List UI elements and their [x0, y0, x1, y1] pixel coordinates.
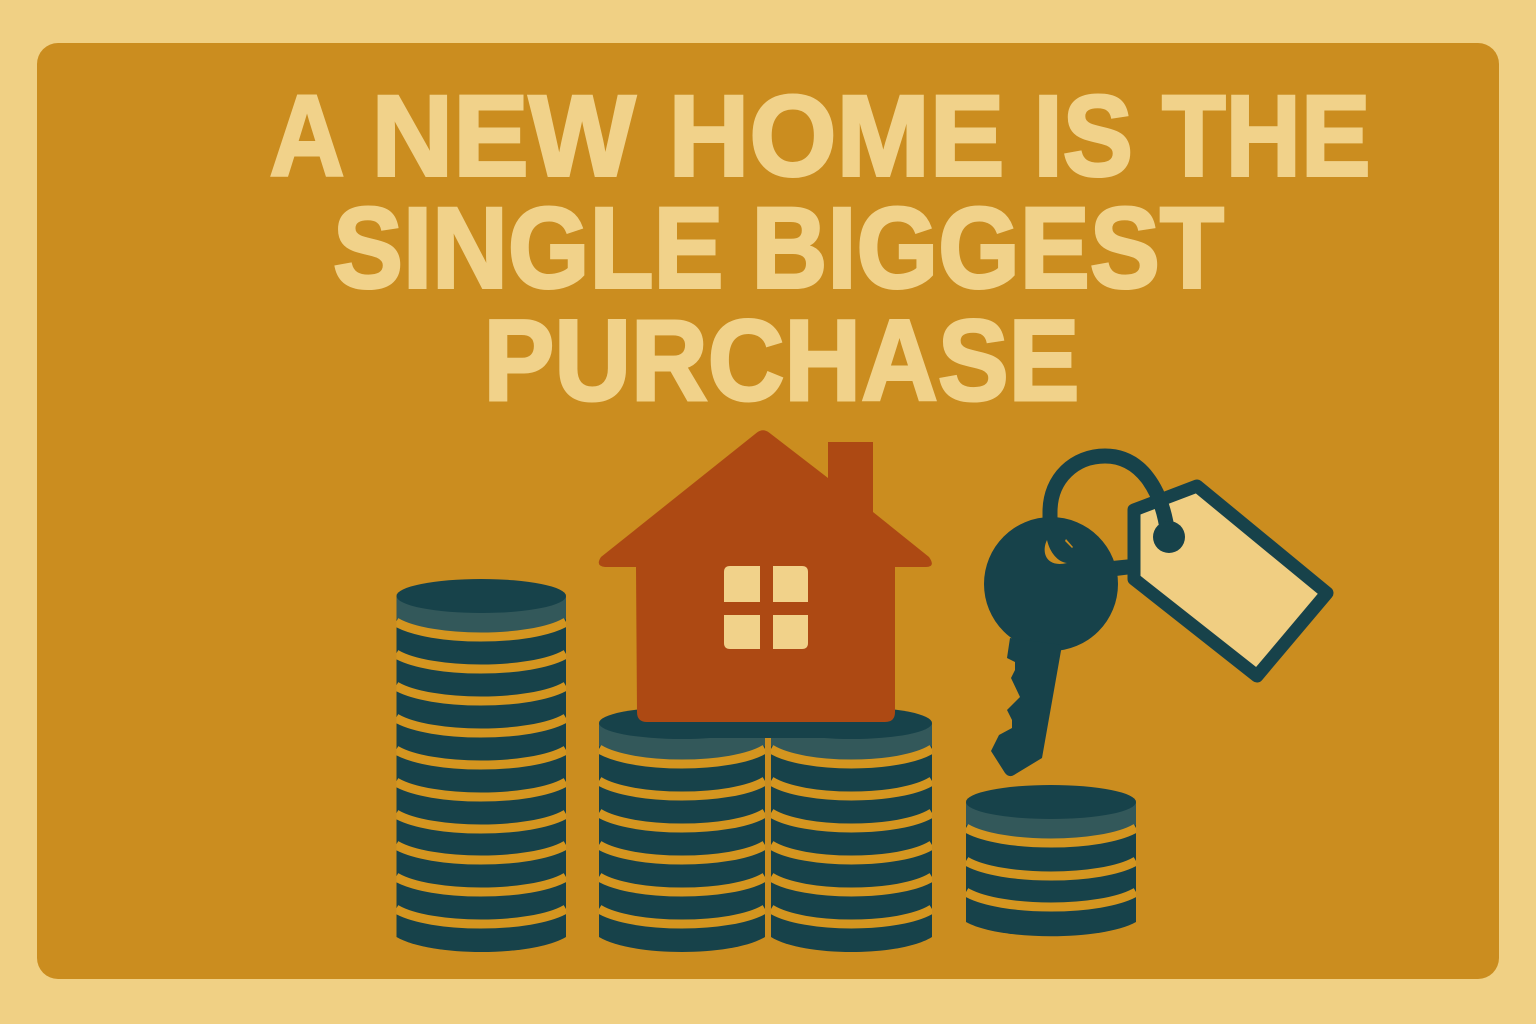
house window [724, 566, 808, 649]
title line 1 [270, 72, 1370, 200]
title line 1: NEW [372, 72, 636, 200]
ring eyelet [1153, 521, 1185, 553]
icon: key with tag [984, 456, 1327, 776]
house body with chimney [599, 430, 932, 722]
key ring [1050, 456, 1168, 535]
coin stack: tall left [396, 579, 566, 952]
tag [1134, 486, 1327, 676]
title line 2: SINGLE [333, 184, 724, 312]
title line 1: HOME [668, 72, 1004, 200]
title line 1: A [270, 72, 344, 200]
key highlight sliver [1065, 539, 1073, 548]
coin stack: centre right [712, 710, 932, 952]
title line 2: BIGGEST [752, 184, 1224, 312]
icon: house [599, 430, 932, 722]
title line 1: THE [1162, 72, 1370, 200]
key head [984, 517, 1118, 651]
key blade [991, 638, 1062, 776]
title line 1: IS [1034, 72, 1133, 200]
coin stack: short right [966, 785, 1136, 936]
key connector [1112, 559, 1132, 576]
title line 2 [333, 184, 1224, 312]
coin stack: centre left [599, 707, 765, 952]
title line 3: PURCHASE [484, 297, 1080, 425]
key highlight [1045, 540, 1067, 564]
title [270, 72, 1370, 425]
